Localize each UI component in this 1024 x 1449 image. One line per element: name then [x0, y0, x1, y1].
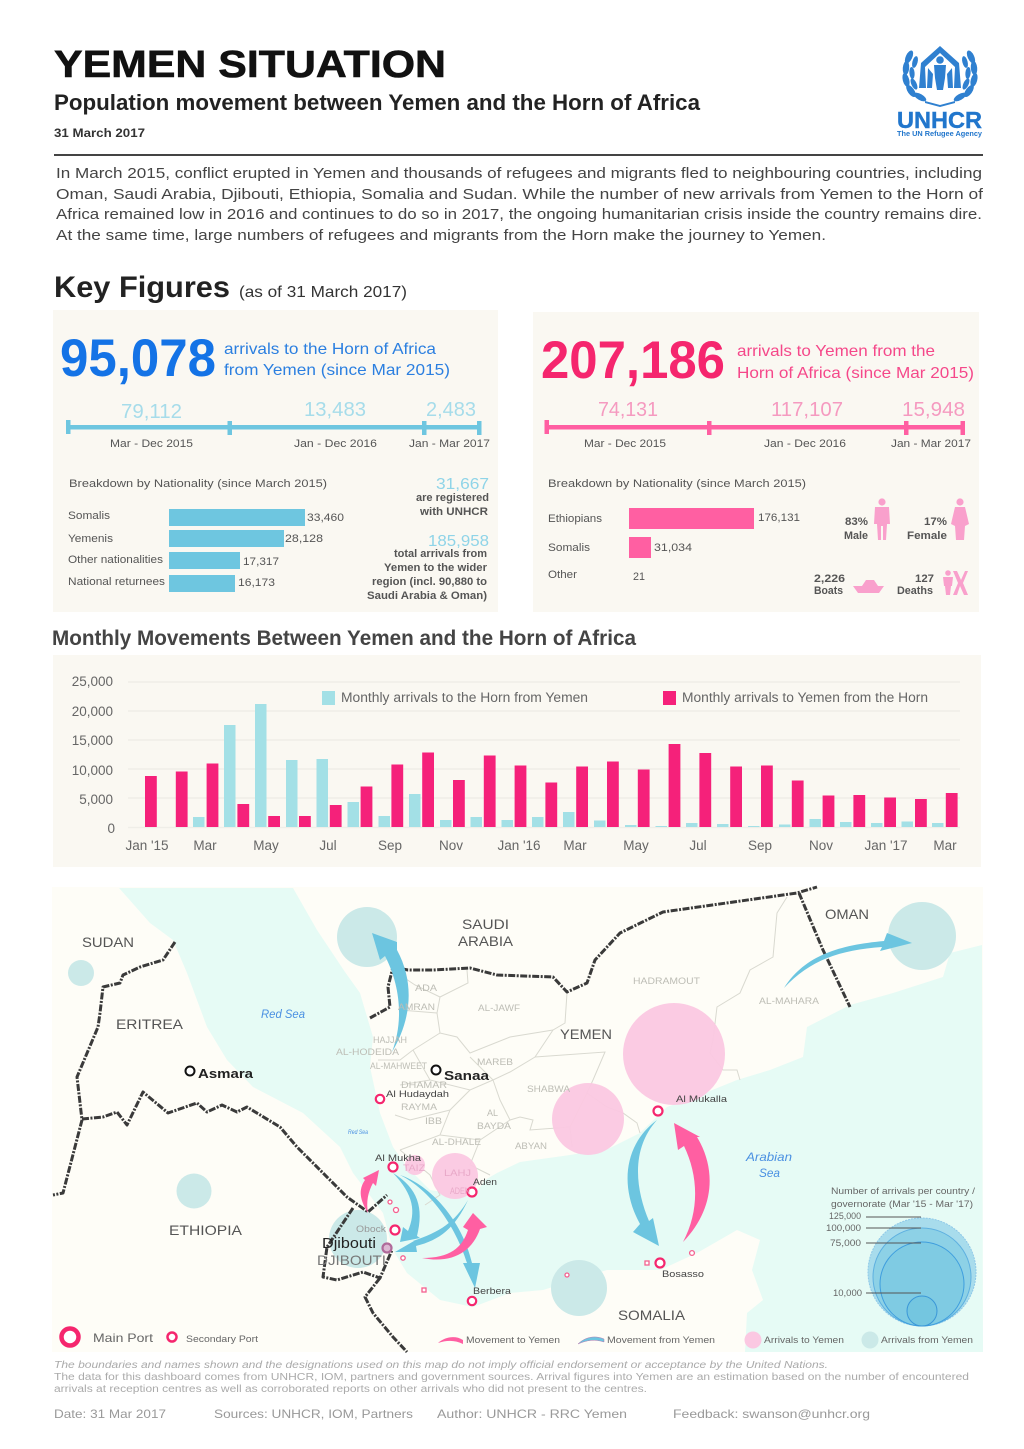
statistic: boats: Boats [814, 585, 843, 597]
proportional circle legend: 10,000 [833, 1288, 862, 1299]
governorate labels: SHABWA [527, 1084, 570, 1094]
nationality bar chart: 17,317 [243, 556, 279, 568]
map legend: Arrivals to Yemen [764, 1335, 844, 1345]
side figures: are registered [416, 492, 489, 504]
nationality bar chart [68, 478, 344, 592]
footer credits: Feedback: swanson@unhcr.org [673, 1407, 870, 1421]
icon: UNHCR logo: The UN Refugee Agency [897, 131, 982, 138]
statistic: female: 17% [924, 516, 947, 528]
x axis labels: Mar [193, 838, 217, 853]
timeline: 74,131 [598, 399, 658, 421]
governorate labels: MAREB [477, 1057, 513, 1067]
arrow: Yemen to Saudi Arabia [372, 933, 409, 1052]
port labels: Bosasso [662, 1269, 704, 1280]
timeline: Jan - Dec 2016 [294, 438, 377, 450]
y axis labels [72, 674, 115, 836]
panel: monthly bar chart [53, 655, 981, 867]
nationality bar chart: Breakdown by Nationality (since March 2015) [69, 478, 327, 490]
map legend: Secondary Port [186, 1334, 259, 1344]
x axis labels: Jan '16 [497, 838, 541, 853]
nationality bar chart: Other nationalities [68, 554, 164, 566]
country labels: SUDAN [82, 934, 134, 950]
country labels: YEMEN [560, 1026, 612, 1042]
sea labels: Red Sea [261, 1007, 305, 1021]
sea labels: Red Sea [348, 1130, 369, 1136]
governorate labels: AL-MAHWEET [370, 1061, 427, 1071]
y axis labels: 5,000 [79, 792, 113, 807]
statistic: male: Male [844, 530, 868, 542]
map legend: Movement from Yemen [607, 1335, 715, 1345]
heading: key figures: Key Figures [54, 271, 230, 304]
arrows: movement from Yemen [372, 933, 912, 1288]
side figures: 185,958 [428, 533, 489, 550]
arrow: Bosasso to Al Mukalla [674, 1123, 710, 1242]
governorate labels: RAYMA [401, 1102, 437, 1112]
x axis labels: Sep [748, 838, 772, 853]
y axis labels: 20,000 [72, 704, 113, 719]
statistic: female [907, 498, 969, 542]
timeline: 15,948 [902, 399, 965, 421]
timeline [544, 399, 971, 450]
disclaimer text: arrivals at reception centres as well as corroborated reports on other arrivals who did not present to the centres. [54, 1384, 647, 1395]
x axis labels [125, 838, 957, 853]
governorate labels: IBB [425, 1116, 442, 1126]
disclaimer text: The boundaries and names shown and the designations used on this map do not imply official endorsement or acceptance by the United Nations. [54, 1360, 828, 1371]
statistic: male [844, 498, 890, 542]
footer credits [54, 1407, 870, 1421]
governorate labels: AMRAN [398, 1002, 435, 1012]
international borders [53, 887, 850, 1352]
intro text: At the same time, large numbers of refugees and migrants from the Horn make the journey to Yemen. [56, 227, 826, 244]
map legend [62, 1328, 973, 1348]
y axis labels: 0 [107, 821, 115, 836]
description [737, 343, 974, 382]
side figures: total arrivals from [394, 548, 487, 560]
governorate labels: HADRAMOUT [633, 976, 701, 986]
circles: arrivals to Yemen [405, 1003, 725, 1199]
capitals [186, 1066, 490, 1252]
nationality bar chart: Yemenis [68, 533, 114, 545]
sea labels: Sea [759, 1166, 780, 1180]
country labels: SAUDI [462, 916, 509, 932]
timeline: 13,483 [304, 399, 366, 421]
x axis labels: Jul [689, 838, 707, 853]
proportional circle legend: 75,000 [830, 1238, 861, 1249]
timeline: Jan - Dec 2016 [764, 438, 846, 450]
side figures: region (incl. 90,880 to [372, 576, 487, 588]
timeline: Mar - Dec 2015 [584, 438, 666, 450]
governorate labels: DHAMAR [401, 1080, 448, 1090]
sea labels [261, 1007, 792, 1180]
port labels: Berbera [473, 1286, 512, 1297]
governorate labels: ABYAN [515, 1141, 547, 1151]
statistic: deaths: Deaths [897, 585, 933, 597]
big number 207,186: 207,186 [541, 331, 725, 390]
arrow: Obock to Al Mukha [361, 1170, 379, 1213]
sea labels: Arabian [745, 1150, 792, 1164]
capitals: Djibouti [322, 1235, 376, 1252]
description: Horn of Africa (since Mar 2015) [737, 365, 974, 382]
timeline: 2,483 [426, 399, 476, 421]
governorate labels: AL-MAHARA [759, 996, 819, 1006]
nationality bar chart: 176,131 [758, 512, 800, 524]
arrow: Aden to Djibouti [395, 1200, 468, 1252]
governorate labels: ADEN [450, 1186, 470, 1196]
statistic: deaths [897, 570, 968, 597]
timeline: 117,107 [771, 399, 843, 421]
capitals: Asmara [198, 1066, 254, 1081]
governorate labels [336, 976, 819, 1196]
heading: key figures [54, 271, 407, 304]
x axis labels: Mar [933, 838, 957, 853]
statistic: boats [814, 573, 884, 597]
governorate labels: AL-DHALE [432, 1137, 481, 1147]
intro text: In March 2015, conflict erupted in Yemen and thousands of refugees and migrants fled to neighbouring countries, including [56, 165, 982, 182]
y axis labels: 15,000 [72, 733, 113, 748]
description [224, 341, 450, 379]
side figures: 31,667 [436, 476, 489, 493]
icon: boat [853, 580, 884, 593]
side figures: with UNHCR [419, 506, 488, 518]
arrow: Yemen to Oman [784, 933, 912, 988]
arrow: Yemen to Berbera [400, 1175, 480, 1288]
x axis labels: May [623, 838, 649, 853]
statistic: boats: 2,226 [814, 573, 845, 585]
date: 31 March 2017 [54, 126, 145, 140]
governorate labels: ADA [415, 983, 437, 993]
chart legend: Monthly arrivals to the Horn from Yemen [341, 690, 588, 705]
disclaimer text: The data for this dashboard comes from UNHCR, IOM, partners and government sources. Arrival figures into Yemen are an estimation based on the number of encountered [54, 1372, 969, 1383]
nationality bar chart: Somalis [548, 542, 591, 554]
heading: monthly movements: Monthly Movements Between Yemen and the Horn of Africa [52, 627, 636, 650]
subtitle: Population movement between Yemen and the Horn of Africa [54, 90, 701, 115]
intro text: Africa remained low in 2016 and continues to do so in 2017, the ongoing humanitarian crisis inside the country remains dire. [56, 206, 982, 223]
icon: UNHCR logo [897, 46, 982, 138]
heading: key figures: (as of 31 March 2017) [239, 284, 407, 301]
proportional circle legend [826, 1186, 976, 1326]
description: arrivals to Yemen from the [737, 343, 935, 360]
disclaimer text [54, 1360, 969, 1395]
governorate labels: BAYDA [477, 1121, 511, 1131]
sea [119, 888, 983, 1352]
side figures: Saudi Arabia & Oman) [367, 590, 487, 602]
statistic: male: 83% [845, 516, 868, 528]
nationality bar chart [548, 478, 806, 583]
nationality bar chart: National returnees [68, 576, 166, 588]
nationality bar chart: 28,128 [285, 533, 323, 545]
governorate labels: AL [487, 1108, 498, 1118]
arrow: Al Mukalla to Bosasso [628, 1120, 659, 1246]
timeline: 79,112 [121, 401, 182, 423]
panel: arrivals to the Horn [53, 310, 498, 612]
x axis labels: Mar [563, 838, 587, 853]
port labels: Al Hudaydah [386, 1089, 449, 1100]
country labels: ARABIA [458, 933, 514, 949]
nationality bar chart: 33,460 [307, 512, 344, 524]
circles: arrivals from Yemen [68, 902, 956, 1316]
proportional circle legend: 125,000 [829, 1211, 861, 1222]
x axis labels: Jan '15 [125, 838, 169, 853]
country labels: ETHIOPIA [169, 1222, 243, 1238]
x axis labels: May [253, 838, 279, 853]
arrow: Al Mukha to Djibouti [393, 1173, 420, 1242]
map legend: Movement to Yemen [466, 1335, 560, 1345]
nationality bar chart: 21 [633, 571, 645, 583]
nationality bar chart: Breakdown by Nationality (since March 2015) [548, 478, 806, 490]
x axis labels: Jul [319, 838, 337, 853]
y axis labels: 10,000 [72, 763, 113, 778]
nationality bar chart: Other [548, 569, 577, 581]
proportional circle legend: Number of arrivals per country / [831, 1186, 975, 1197]
map legend: Main Port [93, 1331, 154, 1345]
timeline [66, 399, 490, 450]
icon: figure and cross [943, 570, 968, 595]
chart legend: Monthly arrivals to Yemen from the Horn [682, 690, 928, 705]
icon: UNHCR logo: UNHCR [897, 107, 982, 133]
x axis labels: Jan '17 [864, 838, 908, 853]
description: arrivals to the Horn of Africa [224, 341, 436, 358]
nationality bar chart: 31,034 [654, 542, 692, 554]
country labels: OMAN [825, 906, 869, 922]
country labels [82, 906, 869, 1323]
port labels: Al Mukha [375, 1153, 422, 1164]
governorate boundaries [378, 897, 787, 1205]
governorate labels: LAHJ [444, 1168, 471, 1178]
chart legend [322, 690, 928, 705]
country labels: SOMALIA [618, 1307, 686, 1323]
intro text: Oman, Saudi Arabia, Djibouti, Ethiopia, Somalia and Sudan. While the number of new arrivals from Yemen to the Horn of [56, 186, 984, 203]
proportional circle legend: governorate (Mar '15 - Mar '17) [831, 1199, 973, 1210]
footer credits: Date: 31 Mar 2017 [54, 1407, 166, 1421]
arrows: movement to Yemen [361, 1123, 710, 1260]
panel: arrivals to Yemen [533, 312, 979, 612]
port labels: Al Mukalla [676, 1094, 728, 1105]
country labels: DJIBOUTI [317, 1252, 386, 1268]
ports [376, 1095, 694, 1305]
big number 95,078: 95,078 [60, 329, 216, 388]
statistic: deaths: 127 [915, 573, 934, 585]
side figures: Yemen to the wider [384, 562, 488, 574]
icon: female figure [951, 498, 969, 540]
timeline: Mar - Dec 2015 [110, 438, 193, 450]
footer credits: Sources: UNHCR, IOM, Partners [214, 1407, 413, 1421]
statistic: female: Female [907, 530, 947, 542]
x axis labels: Nov [439, 838, 463, 853]
y axis labels: 25,000 [72, 674, 113, 689]
port labels [356, 1089, 728, 1297]
intro text [56, 165, 984, 244]
governorate labels: TAIZ [403, 1163, 426, 1173]
nationality bar chart: Ethiopians [548, 513, 603, 525]
x axis labels: Sep [378, 838, 402, 853]
timeline: Jan - Mar 2017 [409, 438, 490, 450]
country labels: ERITREA [116, 1016, 184, 1032]
side figures [367, 476, 489, 602]
governorate labels: AL-HODEIDA [336, 1047, 399, 1057]
footer credits: Author: UNHCR - RRC Yemen [437, 1407, 627, 1421]
title: YEMEN SITUATION [54, 44, 446, 86]
timeline: Jan - Mar 2017 [891, 438, 971, 450]
panel: map [52, 887, 983, 1352]
proportional circle legend: 100,000 [826, 1223, 861, 1234]
bars: arrivals to Yemen [145, 744, 958, 827]
capitals: Sanaa [444, 1068, 490, 1083]
governorate labels: HAJJAH [373, 1035, 407, 1045]
port labels: Aden [473, 1177, 497, 1188]
arrow: Djibouti to Aden [422, 1213, 487, 1260]
map legend: Arrivals from Yemen [881, 1335, 973, 1345]
port labels: Obock [356, 1224, 386, 1235]
description: from Yemen (since Mar 2015) [224, 362, 450, 379]
nationality bar chart: 16,173 [238, 577, 275, 589]
x axis labels: Nov [809, 838, 833, 853]
nationality bar chart: Somalis [68, 510, 111, 522]
governorate labels: AL-JAWF [478, 1003, 521, 1013]
header rule [54, 154, 983, 156]
bars: arrivals to the Horn [193, 704, 944, 827]
icon: male figure [874, 498, 890, 540]
